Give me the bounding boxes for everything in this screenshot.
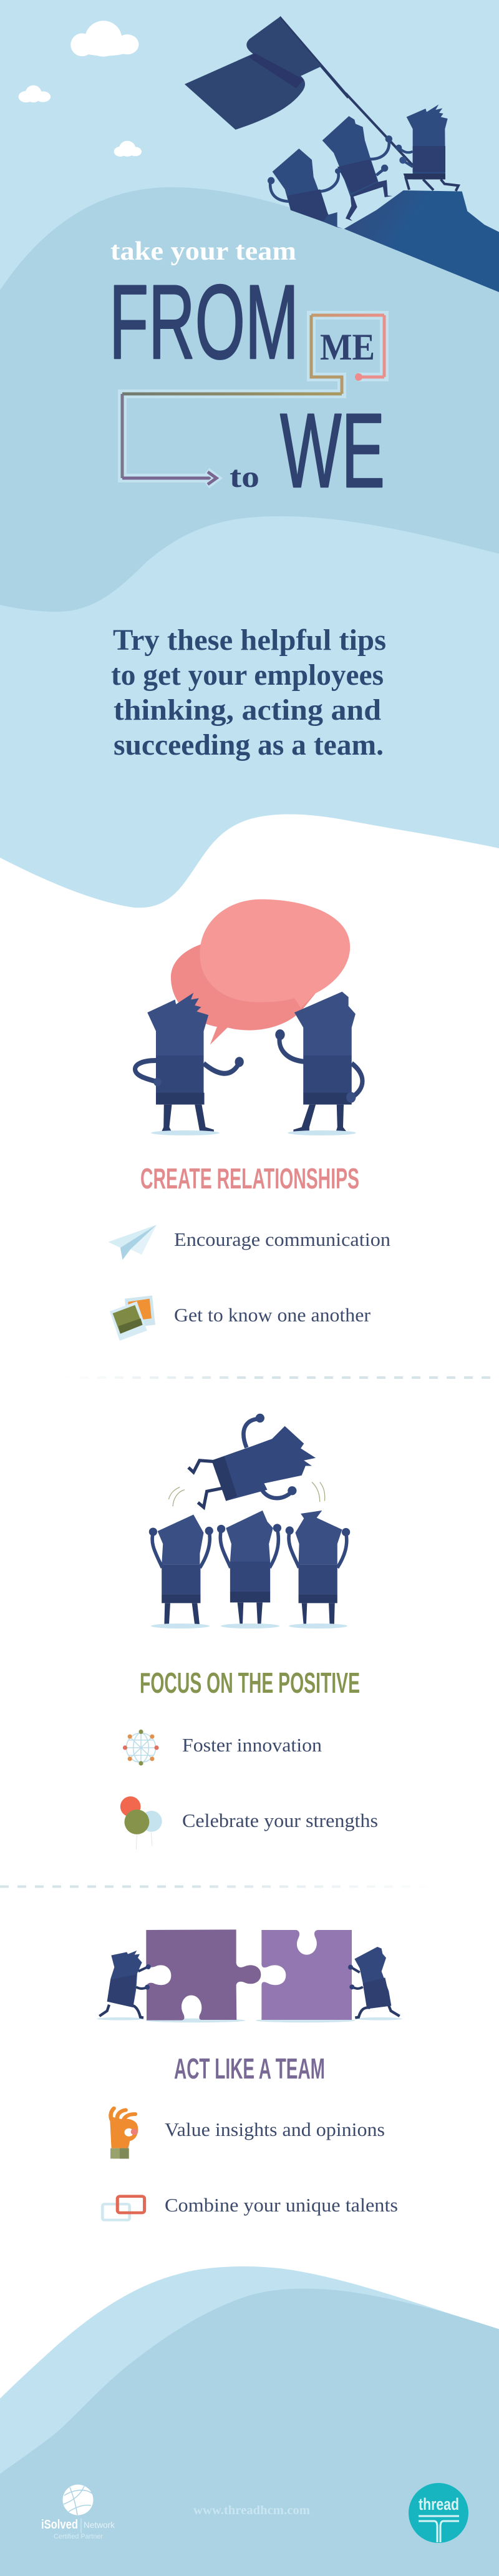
person 1 bbox=[149, 1515, 213, 1627]
icon: ok hand bbox=[110, 2108, 138, 2158]
flag pole bbox=[346, 93, 414, 167]
illustration: two people talking bbox=[135, 899, 362, 1132]
illustration: team tossing a person bbox=[149, 1414, 350, 1627]
icon: clouds bbox=[19, 21, 142, 157]
route line from me to we bbox=[122, 315, 384, 486]
person pushing left piece bbox=[99, 1951, 151, 2018]
title word: ME: ME bbox=[320, 326, 375, 368]
intro paragraph bbox=[111, 624, 386, 762]
person pushing right piece bbox=[348, 1947, 400, 2018]
top light blue background wave bbox=[0, 0, 499, 908]
tip text: get to know one another: Get to know one another bbox=[174, 1304, 371, 1326]
intro paragraph: thinking, acting and bbox=[114, 693, 381, 727]
intro paragraph: succeeding as a team. bbox=[114, 728, 384, 762]
speech bubble front bbox=[200, 899, 350, 1008]
title word: WE: WE bbox=[280, 391, 385, 509]
intro paragraph: Try these helpful tips bbox=[113, 624, 386, 657]
tip text: foster innovation: Foster innovation bbox=[182, 1734, 322, 1756]
tip text: encourage communication: Encourage communication bbox=[174, 1228, 391, 1250]
climber: middle bbox=[320, 116, 392, 221]
tip text: combine your unique talents: Combine your unique talents bbox=[165, 2194, 398, 2216]
heading: create relationships: CREATE RELATIONSHIPS bbox=[140, 1162, 359, 1195]
intro paragraph: to get your employees bbox=[111, 659, 384, 692]
globe bbox=[62, 2484, 94, 2515]
puzzle piece right bbox=[261, 1930, 352, 2020]
climber: right bbox=[395, 104, 458, 191]
mountain bbox=[344, 190, 499, 292]
tossed person bbox=[188, 1414, 316, 1507]
intro line: take your team: take your team bbox=[110, 237, 296, 266]
website url: www.threadhcm.com bbox=[193, 2504, 310, 2517]
darker blue hill behind title bbox=[0, 187, 499, 612]
logo: iSolved network: Network bbox=[84, 2520, 115, 2530]
person right bbox=[275, 992, 362, 1132]
icon: network globe bbox=[123, 1730, 159, 1766]
climber: left bbox=[268, 149, 342, 228]
icon: paper plane bbox=[108, 1225, 157, 1260]
logo: iSolved network bbox=[41, 2484, 115, 2540]
logo: iSolved network: Certified Partner bbox=[54, 2533, 103, 2540]
footer dark wave bbox=[0, 2289, 499, 2576]
title word: to: to bbox=[230, 459, 259, 494]
person 3 bbox=[286, 1511, 350, 1627]
speech bubble back bbox=[171, 941, 320, 1045]
mountain with climbing team bbox=[268, 93, 499, 292]
icon: linked rectangles bbox=[102, 2196, 145, 2220]
illustration: team joining puzzle pieces bbox=[97, 1929, 402, 2022]
icon: photos bbox=[110, 1296, 155, 1341]
heading: act like a team: ACT LIKE A TEAM bbox=[174, 2052, 325, 2085]
footer light wave bbox=[0, 2266, 499, 2576]
logo: thread: thread bbox=[419, 2495, 459, 2514]
title word: FROM: FROM bbox=[109, 263, 299, 381]
logo: iSolved network: iSolved bbox=[41, 2518, 78, 2532]
person 2 bbox=[217, 1511, 281, 1627]
logo: thread bbox=[409, 2483, 468, 2543]
heading: focus on the positive: FOCUS ON THE POSITIVE bbox=[140, 1667, 360, 1699]
ground shadows bbox=[97, 2017, 402, 2022]
motion lines bbox=[168, 1482, 325, 1506]
ground shadows: second illustration bbox=[151, 1623, 347, 1628]
person left bbox=[135, 993, 244, 1132]
puzzle piece left bbox=[146, 1929, 261, 2020]
tip text: celebrate your strengths: Celebrate your strengths bbox=[182, 1810, 378, 1831]
tip text: value insights and opinions: Value insights and opinions bbox=[165, 2118, 385, 2140]
icon: balloons bbox=[120, 1796, 162, 1849]
ground shadows: first illustration bbox=[151, 1130, 356, 1135]
icon: flag bbox=[185, 17, 349, 130]
